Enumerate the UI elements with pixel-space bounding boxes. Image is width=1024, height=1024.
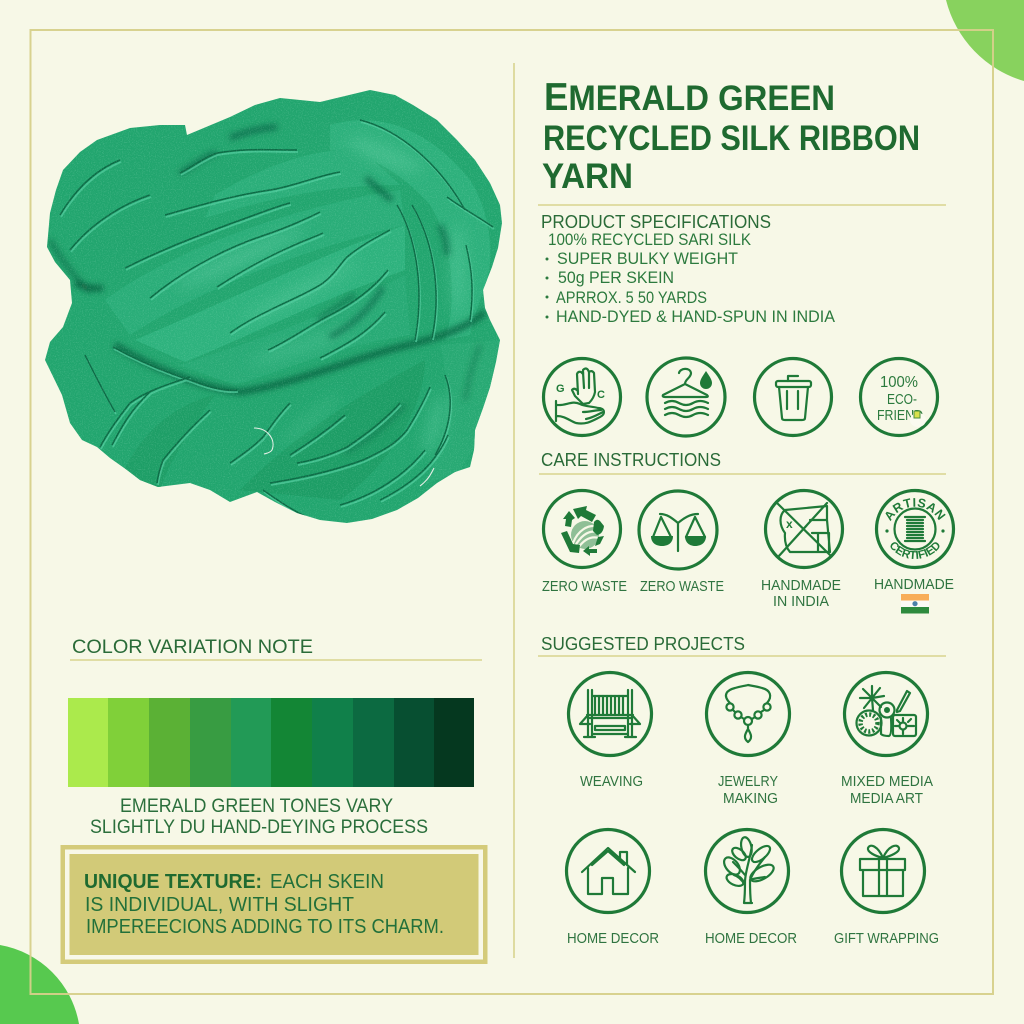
product specifications: APRROX. 5 50 YARDS bbox=[556, 289, 707, 307]
icon: hand wash: G bbox=[556, 383, 565, 395]
heading: care instructions: CARE INSTRUCTIONS bbox=[541, 449, 721, 470]
labels: projects row 1: JEWELRY bbox=[718, 774, 778, 790]
color note text bbox=[90, 796, 428, 838]
icon: mixed media art bbox=[844, 672, 928, 756]
labels: projects row 1: WEAVING bbox=[580, 774, 643, 790]
heading: color variation note: COLOR VARIATION NOTE bbox=[72, 636, 313, 658]
labels: projects row 2: GIFT WRAPPING bbox=[834, 931, 939, 947]
icon: balance scale bbox=[639, 491, 717, 569]
icon: necklace bbox=[706, 672, 790, 756]
color note text: EMERALD GREEN TONES VARY bbox=[120, 796, 393, 817]
icon: hand wash bbox=[544, 358, 620, 436]
icon: house bbox=[566, 830, 650, 912]
icon: zero waste recycle bbox=[544, 490, 620, 568]
labels: badges bbox=[542, 577, 954, 610]
labels: projects row 1 bbox=[580, 774, 933, 807]
deep shadows bbox=[50, 127, 485, 452]
divider: projects bbox=[538, 655, 946, 657]
product specifications: PRODUCT SPECIFICATIONS bbox=[541, 212, 771, 232]
corner circle: top right bbox=[946, 0, 1024, 81]
divider: care bbox=[539, 473, 946, 475]
labels: projects row 1: MIXED MEDIA bbox=[841, 774, 933, 790]
labels: projects row 1: MEDIA ART bbox=[850, 791, 923, 807]
icon: 100% eco-friendly badge bbox=[860, 358, 938, 436]
icon: 100% eco-friendly badge: FRIEND bbox=[877, 407, 923, 424]
product specifications: 100% RECYCLED SARI SILK bbox=[548, 231, 751, 249]
callout: unique texture: UNIQUE TEXTURE: bbox=[84, 870, 262, 893]
icon: crossed out package bbox=[766, 490, 842, 568]
icon: hanger and water bbox=[647, 358, 725, 436]
icon: trash bin bbox=[754, 358, 832, 436]
labels: projects row 2: HOME DECOR bbox=[705, 931, 797, 947]
icon: crossed out package: x bbox=[786, 517, 793, 531]
icon: 100% eco-friendly badge: 100% bbox=[880, 374, 918, 391]
icon: artisan certified seal: CERTIFIED bbox=[890, 542, 940, 559]
icon: weaving loom bbox=[568, 672, 652, 756]
title: YARN bbox=[542, 157, 633, 196]
title: RECYCLED SILK RIBBON bbox=[543, 119, 920, 158]
callout: unique texture: EACH SKEIN bbox=[270, 870, 384, 893]
icon: artisan certified seal: ARTISAN bbox=[886, 498, 946, 522]
labels: badges: IN INDIA bbox=[773, 594, 829, 610]
icon: tree bbox=[706, 830, 788, 912]
center divider bbox=[513, 63, 515, 958]
labels: projects row 2 bbox=[567, 931, 939, 947]
dark strand cracks bbox=[60, 120, 493, 520]
product specifications: 50g PER SKEIN bbox=[558, 269, 674, 287]
title bbox=[542, 76, 920, 196]
divider: title bbox=[538, 204, 946, 206]
labels: projects row 1: MAKING bbox=[723, 791, 778, 807]
corner circle: bottom left bbox=[0, 945, 79, 1024]
labels: badges: HANDMADE bbox=[761, 578, 841, 594]
loose threads bbox=[254, 428, 434, 486]
labels: badges: ZERO WASTE bbox=[542, 579, 627, 595]
callout: unique texture bbox=[60, 845, 488, 964]
product specifications: SUPER BULKY WEIGHT bbox=[557, 250, 738, 268]
icon: hand wash: C bbox=[597, 389, 605, 401]
labels: badges: HANDMADE bbox=[874, 577, 954, 593]
product specifications bbox=[541, 212, 835, 326]
callout: unique texture: IS INDIVIDUAL, WITH SLIGHT bbox=[85, 893, 354, 916]
product specifications: HAND-DYED & HAND-SPUN IN INDIA bbox=[556, 308, 835, 326]
labels: projects row 2: HOME DECOR bbox=[567, 931, 659, 947]
divider: color note bbox=[70, 659, 482, 661]
light strand edges bbox=[61, 122, 494, 522]
color note text: SLIGHTLY DU HAND-DEYING PROCESS bbox=[90, 817, 428, 838]
title: EMERALD GREEN bbox=[544, 76, 835, 119]
color swatch strip bbox=[68, 698, 474, 787]
strand bands bbox=[105, 120, 500, 500]
icon: india flag bbox=[901, 594, 929, 614]
panel: yarn photo bbox=[40, 85, 510, 530]
soft highlights bbox=[173, 132, 466, 458]
callout: unique texture: IMPEREECIONS ADDING TO ITS CHARM. bbox=[86, 915, 444, 938]
icon: gift box bbox=[842, 830, 924, 912]
labels: badges: ZERO WASTE bbox=[640, 579, 724, 595]
icon: 100% eco-friendly badge: ECO- bbox=[887, 391, 917, 408]
heading: suggested projects: SUGGESTED PROJECTS bbox=[541, 633, 745, 654]
icon: artisan certified seal bbox=[874, 488, 956, 570]
